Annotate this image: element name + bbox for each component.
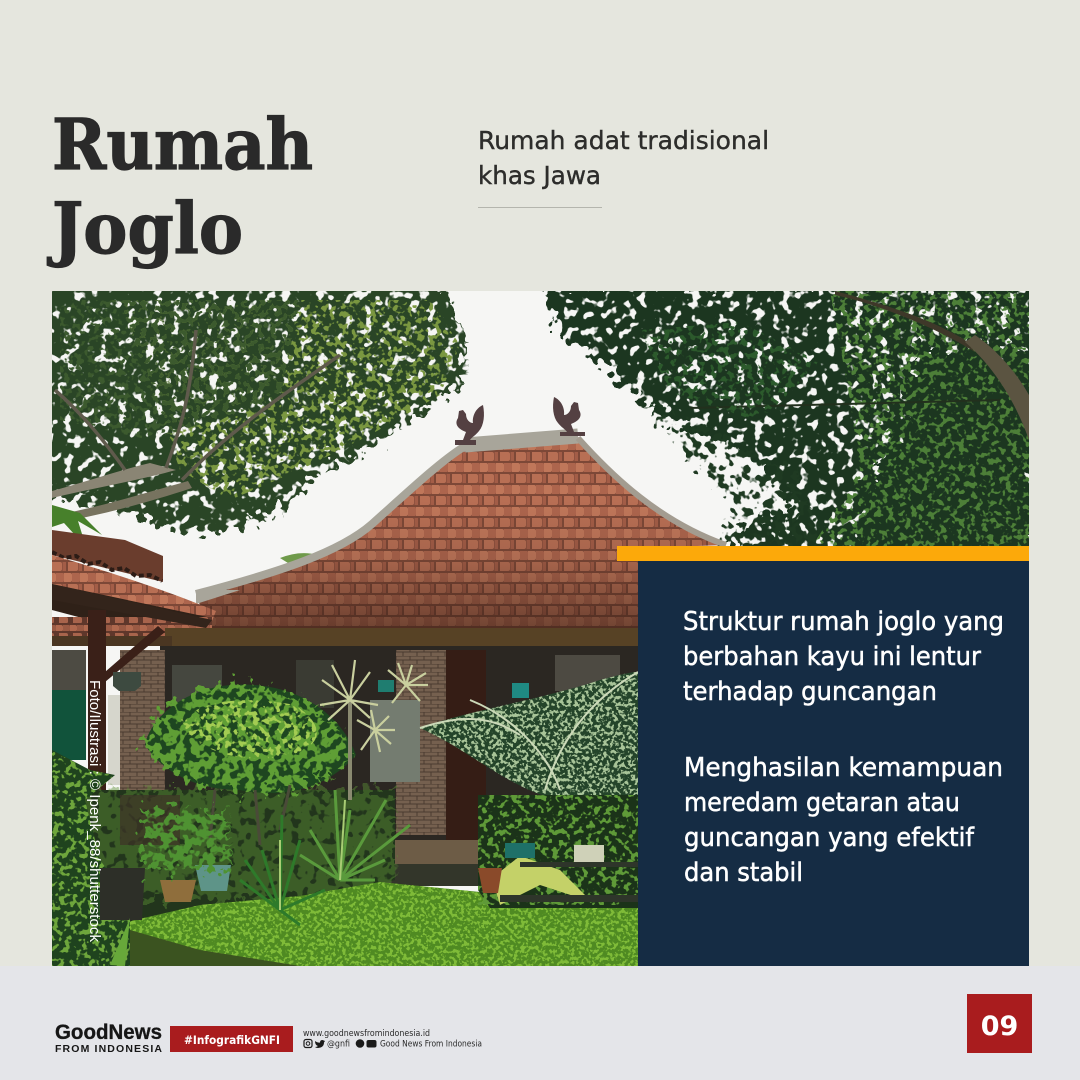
panel text: terhadap guncangan xyxy=(683,677,937,707)
title: Rumah xyxy=(52,103,313,186)
house wall xyxy=(52,610,638,886)
panel text: berbahan kayu ini lentur xyxy=(683,642,981,672)
hashtag badge: #InfografikGNFI xyxy=(184,1033,280,1047)
right tree xyxy=(545,285,1040,560)
website and social links: Good News From Indonesia xyxy=(380,1040,482,1050)
panel text: guncangan yang efektif xyxy=(684,823,975,853)
caption: Foto/Ilustrasi : © Ipenk_88/shutterstock xyxy=(86,680,102,943)
page number badge: 09 xyxy=(981,1011,1018,1042)
left pavilion roof xyxy=(52,530,216,636)
photo: joglo house and garden xyxy=(40,280,1040,975)
website and social links: www.goodnewsfromindonesia.id xyxy=(303,1029,430,1039)
title xyxy=(46,103,313,270)
grass xyxy=(130,882,638,966)
subtitle xyxy=(478,126,769,208)
round bush xyxy=(145,684,356,845)
foliage behind roof xyxy=(280,553,312,563)
logo: GoodNews From Indonesia: FROM INDONESIA xyxy=(55,1043,162,1055)
panel text: meredam getaran atau xyxy=(684,788,960,818)
footer band xyxy=(0,966,1080,1080)
hanging pots xyxy=(113,672,529,698)
right potted plants xyxy=(478,795,638,908)
subtitle: Rumah adat tradisional xyxy=(478,126,769,155)
panel text: Struktur rumah joglo yang xyxy=(683,607,1004,637)
website and social links xyxy=(303,1029,482,1050)
title: Joglo xyxy=(46,187,243,270)
spiky dracaena xyxy=(320,660,428,800)
logo: GoodNews From Indonesia xyxy=(55,1021,162,1055)
subtitle: khas Jawa xyxy=(478,161,601,190)
upper roof xyxy=(196,436,726,633)
logo: GoodNews From Indonesia: GoodNews xyxy=(55,1021,162,1044)
panel text xyxy=(683,607,1004,888)
garden undergrowth xyxy=(85,782,399,922)
navy text panel xyxy=(638,561,1029,966)
left tree xyxy=(40,280,468,547)
left garden plants xyxy=(52,750,235,966)
panel text: dan stabil xyxy=(684,858,803,888)
spiky pandanus xyxy=(240,790,410,925)
page number badge xyxy=(967,994,1032,1053)
orange accent bar xyxy=(617,546,1029,561)
ferns xyxy=(420,672,638,800)
website and social links: @gnfi xyxy=(327,1040,350,1050)
panel text: Menghasilan kemampuan xyxy=(684,753,1003,783)
roosters xyxy=(455,397,585,445)
hashtag badge xyxy=(170,1026,293,1052)
